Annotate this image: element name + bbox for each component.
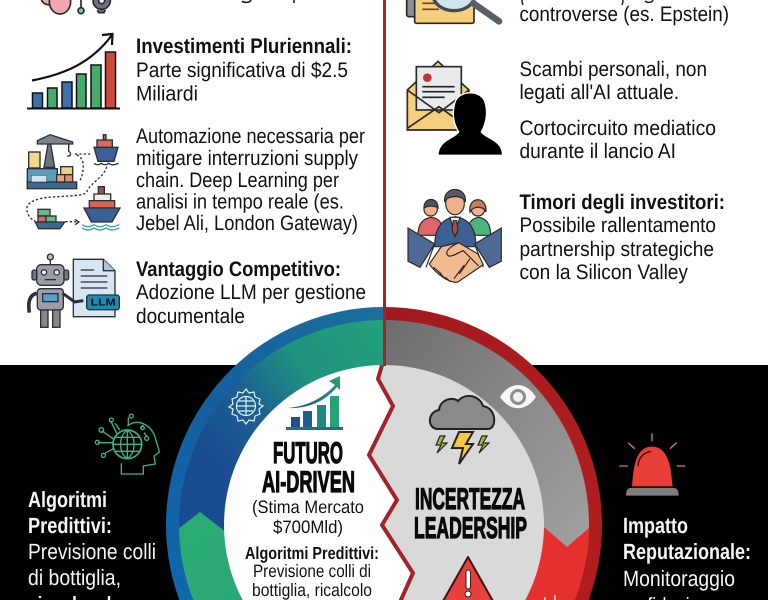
- center divider: [383, 0, 386, 366]
- text: Automazione: analisi in tempo reale (es.: [136, 190, 344, 214]
- text: Impatto Reputazionale: [623, 513, 751, 600]
- text: Timori degli investitori: partnership strategiche: [520, 238, 714, 261]
- icon: cropped brain and gear: [41, 0, 110, 14]
- icon: investors and handshake: [408, 189, 501, 282]
- circular diagram: [166, 307, 620, 600]
- text: Vantaggio Competitivo: Vantaggio Competitivo:: [136, 258, 341, 281]
- lower left band: blue under arrow: [179, 525, 224, 530]
- text: Incertezza Leadership: LEADERSHIP: [414, 512, 527, 545]
- text: Scambi personali: legati all'AI attuale.: [520, 81, 679, 104]
- text: Incertezza Leadership: INCERTEZZA: [415, 483, 525, 516]
- text: Algoritmi Predittivi left: [28, 487, 156, 600]
- icon: cropped white marks on red band: [545, 595, 555, 600]
- right half: red outer ring: [384, 307, 602, 600]
- text: Cortocircuito mediatico: durante il lancio AI: [520, 140, 676, 163]
- text: Scambi personali: Scambi personali, non: [520, 58, 707, 81]
- icon: folder with magnifying glass: [407, 0, 499, 23]
- text: Vantaggio Competitivo: [136, 258, 366, 328]
- red band below pointer: [526, 528, 589, 600]
- text: Investimenti Pluriennali: [136, 35, 352, 106]
- icon: eye: [500, 385, 536, 408]
- text: controverse: controverse (es. Epstein): [520, 3, 729, 26]
- text: Futuro AI-Driven: AI-DRIVEN: [262, 466, 355, 499]
- icon: gear with globe: [229, 389, 263, 424]
- text: Algoritmi Predittivi left: Previsione colli: [28, 539, 156, 564]
- text: Stima mercato: $700Mld): [273, 517, 343, 537]
- text: Algoritmi Predittivi center: Algoritmi Predittivi:: [245, 543, 379, 563]
- text: Automazione: [136, 125, 365, 235]
- gray inner right half: [370, 365, 544, 600]
- text: Scambi personali: [520, 58, 707, 104]
- green arrow: [179, 512, 243, 600]
- text: Algoritmi Predittivi left: Algoritmi: [28, 487, 107, 512]
- icon: robot with LLM document: [29, 254, 119, 327]
- left half: blue outer ring: [166, 307, 384, 600]
- text: Cortocircuito mediatico: [520, 117, 716, 163]
- text: Timori degli investitori: Possibile rallentamento: [520, 214, 716, 237]
- icon: storm cloud: [430, 396, 494, 464]
- text: Automazione: Automazione necessaria per: [136, 125, 365, 148]
- text: Investimenti Pluriennali: Miliardi: [136, 82, 198, 106]
- text: Investimenti Pluriennali: Investimenti Pluriennali:: [136, 35, 352, 58]
- text: Vantaggio Competitivo: documentale: [136, 305, 245, 328]
- right band with gray pointer: [384, 315, 594, 555]
- icon: growth chart: [286, 376, 343, 430]
- text: Algoritmi Predittivi center: Previsione colli di: [253, 561, 371, 581]
- text: Cortocircuito mediatico: Cortocircuito mediatico: [520, 117, 716, 140]
- icon: cropped text descenders left: [242, 0, 294, 3]
- black bottom background: [0, 365, 768, 600]
- icon: growth bar chart: [27, 34, 120, 108]
- text: Stima mercato: [252, 497, 364, 537]
- text: Algoritmi Predittivi left: di bottiglia,: [28, 565, 121, 590]
- text: Automazione: chain. Deep Learning per: [136, 169, 339, 192]
- text: Algoritmi Predittivi center: bottiglia, ricalcolo: [252, 580, 372, 600]
- icon: red siren: [619, 433, 685, 496]
- white top background: [0, 0, 768, 365]
- text: Vantaggio Competitivo: Adozione LLM per gestione: [136, 281, 366, 304]
- text: Algoritmi Predittivi left: Predittivi:: [28, 513, 112, 538]
- text: Impatto Reputazionale: Impatto: [623, 513, 688, 538]
- text: Algoritmi Predittivi center: [245, 543, 379, 600]
- icon: envelope and silhouette: [407, 61, 503, 155]
- left band: [179, 320, 384, 525]
- white inner left half: [224, 365, 411, 600]
- text: Automazione: mitigare interruzioni supply: [136, 147, 358, 170]
- icon: robot with LLM document: LLM: [91, 297, 116, 308]
- icon: head with globe: [95, 414, 159, 474]
- text: Automazione: Jebel Ali, London Gateway): [136, 212, 358, 235]
- text: Investimenti Pluriennali: Parte significativa di $2.5: [136, 59, 348, 82]
- text: Futuro AI-Driven: [262, 437, 355, 499]
- text: Incertezza Leadership: [414, 483, 527, 545]
- text: Stima mercato: (Stima Mercato: [252, 497, 364, 517]
- icon: port and ships: [27, 135, 120, 230]
- crack line: [369, 365, 413, 600]
- text: Timori degli investitori: [520, 191, 725, 284]
- icon: warning triangle: [438, 557, 498, 600]
- text: Impatto Reputazionale: Monitoraggio: [623, 566, 735, 591]
- text: Futuro AI-Driven: FUTURO: [273, 437, 343, 470]
- text: Timori degli investitori: con la Silicon Valley: [520, 261, 688, 284]
- text: Timori degli investitori: Timori degli investitori:: [520, 191, 725, 214]
